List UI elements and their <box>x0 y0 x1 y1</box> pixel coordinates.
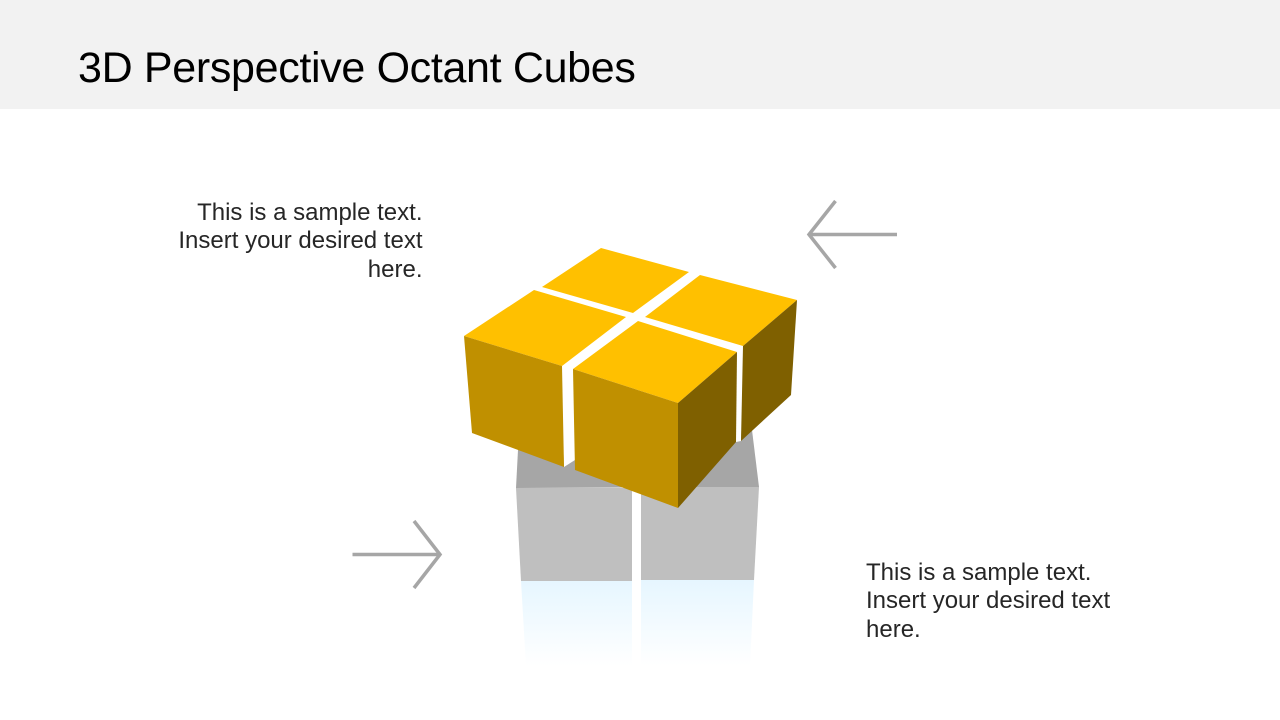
text block: lower right: here. <box>866 616 921 643</box>
text block: lower right: Insert your desired text <box>866 587 1110 614</box>
header band <box>0 0 1280 109</box>
lower grey cubes <box>516 430 759 581</box>
grey cubes top face <box>516 430 759 488</box>
grey cube right front face <box>641 487 759 580</box>
text block: upper left: Insert your desired text <box>178 227 422 254</box>
title: 3D Perspective Octant Cubes <box>78 44 636 92</box>
text block: lower right: This is a sample text. <box>866 559 1091 586</box>
arrow: pointing left <box>809 201 897 268</box>
reflection of lower cubes <box>521 580 754 666</box>
arrow: pointing right <box>352 521 440 588</box>
white gaps between upper cubes <box>560 345 745 467</box>
back cube top <box>542 248 689 313</box>
right cube <box>645 275 797 441</box>
grey cube left front face <box>516 488 632 581</box>
front cube <box>573 321 737 508</box>
text block: upper left <box>178 199 422 283</box>
text block: upper left: here. <box>368 256 422 283</box>
text block: upper left: This is a sample text. <box>197 199 422 226</box>
left cube <box>464 290 626 467</box>
text block: lower right <box>866 559 1110 643</box>
upper yellow cubes <box>464 248 797 508</box>
